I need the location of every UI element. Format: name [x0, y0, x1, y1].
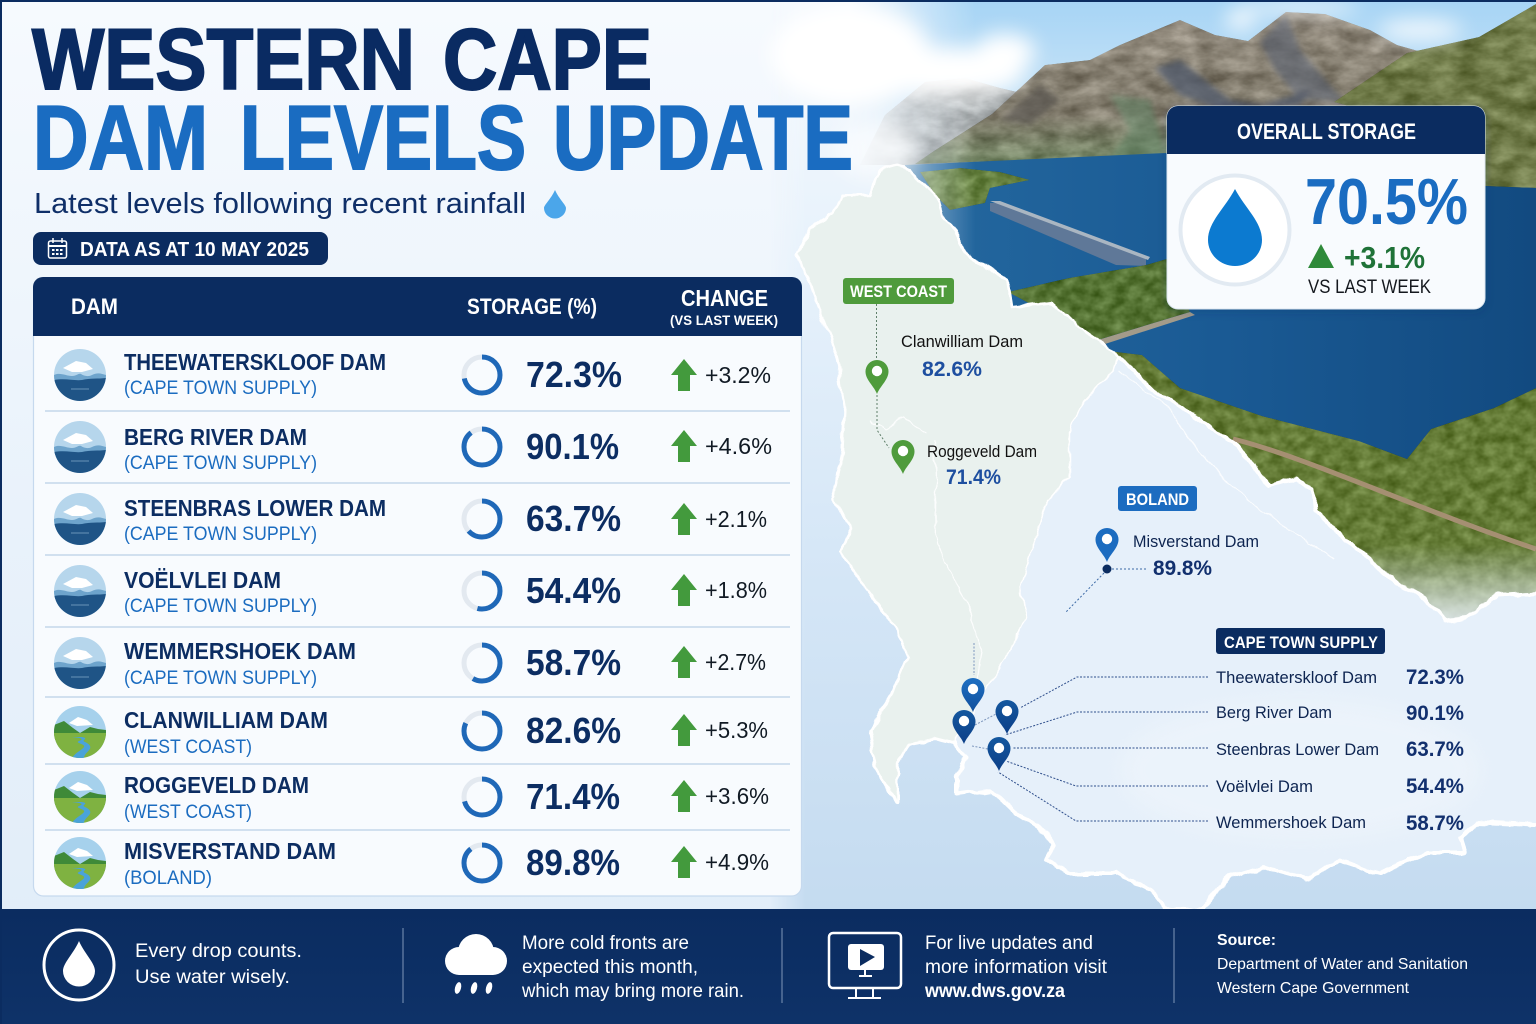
Boland region labels: [1066, 486, 1259, 612]
row: Roggeveld Dam: [54, 771, 769, 824]
icon: calendar: [48, 238, 66, 258]
icon: storage water drop: [1180, 176, 1290, 284]
table header: STORAGE (%): [467, 294, 597, 319]
row: Berg River Dam: +4.6%: [705, 433, 772, 459]
list: Cape Town dams: 72.3%: [1406, 666, 1464, 689]
pin: Cape Town dam 4: [988, 737, 1010, 771]
footer: [0, 909, 1536, 1024]
row: Theewaterskloof Dam: [54, 349, 771, 401]
label: Misverstand Dam: Misverstand Dam: [1133, 532, 1259, 551]
footer: source: Department of Water and Sanitation: [1217, 956, 1468, 973]
row: Theewaterskloof Dam: +3.2%: [705, 362, 771, 388]
badge: West Coast: WEST COAST: [850, 282, 948, 301]
row: Steenbras Lower Dam: (CAPE TOWN SUPPLY): [124, 524, 317, 545]
row: Misverstand Dam: MISVERSTAND DAM: [124, 838, 336, 864]
row: Clanwilliam Dam: 82.6%: [526, 710, 621, 751]
row: Theewaterskloof Dam: THEEWATERSKLOOF DAM: [124, 349, 386, 375]
badge: Boland: [1118, 486, 1197, 511]
leader lines: [972, 643, 1208, 821]
table header: [33, 277, 802, 336]
list: Cape Town dams: [1216, 666, 1464, 835]
row: Wemmershoek Dam: [54, 637, 766, 689]
label: Roggeveld Dam: 71.4%: [946, 466, 1001, 489]
badge: Cape Town Supply: CAPE TOWN SUPPLY: [1224, 633, 1379, 652]
landscape photo: mountains, lake and dam: [869, 2, 1536, 618]
row: Voelvlei Dam: 54.4%: [526, 570, 621, 611]
row: Steenbras Lower Dam: 63.7%: [526, 498, 621, 539]
clouds: [770, 2, 1462, 180]
row: Wemmershoek Dam: 58.7%: [526, 642, 621, 683]
footer: website: www.dws.gov.za: [924, 981, 1065, 1002]
list: Cape Town dams: 54.4%: [1406, 775, 1464, 798]
table header: CHANGE: [681, 285, 768, 311]
badge: West Coast: [843, 278, 954, 304]
row: Berg River Dam: BERG RIVER DAM: [124, 424, 307, 450]
sea background: [779, 276, 1536, 909]
row: Roggeveld Dam: +3.6%: [705, 783, 769, 809]
icon: rain cloud: [445, 934, 507, 995]
row: Steenbras Lower Dam: +2.1%: [705, 506, 767, 532]
panel: dam table: [33, 277, 802, 896]
list: Cape Town dams: Berg River Dam: [1216, 703, 1332, 722]
footer: water message: Every drop counts.: [135, 941, 302, 962]
label: Roggeveld Dam: [927, 442, 1037, 489]
title: LEVELS: [240, 88, 526, 189]
row: Misverstand Dam: 89.8%: [526, 842, 620, 883]
icon: monitor with play button: [829, 933, 901, 998]
list: Cape Town dams: 90.1%: [1406, 702, 1464, 725]
title: UPDATE: [553, 88, 853, 189]
footer: water message: [135, 941, 302, 988]
label: Clanwilliam Dam: [901, 332, 1023, 381]
pin: Misverstand: [1096, 528, 1118, 562]
weekly change: +3.1%: [1344, 240, 1425, 275]
list: Cape Town dams: 58.7%: [1406, 812, 1464, 835]
table header: DAM: [71, 294, 118, 319]
row: Clanwilliam Dam: CLANWILLIAM DAM: [124, 707, 328, 733]
row: Steenbras Lower Dam: [54, 493, 767, 545]
label: Misverstand Dam: 89.8%: [1153, 557, 1212, 580]
row: Voelvlei Dam: +1.8%: [705, 577, 767, 603]
row: Theewaterskloof Dam: 72.3%: [526, 354, 622, 395]
row: Voelvlei Dam: [54, 565, 767, 617]
footer: water message: Use water wisely.: [135, 967, 290, 988]
row: Wemmershoek Dam: WEMMERSHOEK DAM: [124, 638, 356, 664]
footer: source: Western Cape Government: [1217, 980, 1410, 997]
footer: rain forecast: More cold fronts are: [522, 933, 689, 954]
row: Roggeveld Dam: ROGGEVELD DAM: [124, 772, 309, 798]
row: Misverstand Dam: (BOLAND): [124, 868, 212, 889]
row: Berg River Dam: 90.1%: [526, 426, 619, 467]
pin: Roggeveld: [892, 440, 914, 474]
list: Cape Town dams: Steenbras Lower Dam: [1216, 740, 1379, 759]
row: Steenbras Lower Dam: STEENBRAS LOWER DAM: [124, 495, 386, 521]
title: CAPE: [443, 12, 652, 108]
label: Clanwilliam Dam: 82.6%: [922, 358, 982, 381]
label: Roggeveld Dam: Roggeveld Dam: [927, 442, 1037, 461]
date badge: DATA AS AT 10 MAY 2025: [80, 239, 309, 261]
West Coast region labels: [843, 278, 1037, 489]
pin: Cape Town dam 1: [962, 678, 984, 712]
footer: rain forecast: expected this month,: [522, 957, 698, 978]
footer: website: [924, 933, 1108, 1002]
title: WESTERN: [32, 12, 415, 108]
pin: Cape Town dam 3: [996, 700, 1018, 734]
icon: water drop: [544, 190, 566, 218]
row: Clanwilliam Dam: [54, 706, 768, 759]
row: Wemmershoek Dam: (CAPE TOWN SUPPLY): [124, 668, 317, 689]
row: Voelvlei Dam: (CAPE TOWN SUPPLY): [124, 596, 317, 617]
storage header: OVERALL STORAGE: [1237, 119, 1416, 144]
row: Misverstand Dam: [54, 837, 769, 890]
label: Clanwilliam Dam: Clanwilliam Dam: [901, 332, 1023, 351]
row: Wemmershoek Dam: +2.7%: [705, 649, 766, 675]
footer: rain forecast: which may bring more rain.: [521, 981, 744, 1002]
row: Roggeveld Dam: 71.4%: [526, 776, 620, 817]
title: DAM: [33, 88, 208, 189]
row: Theewaterskloof Dam: (CAPE TOWN SUPPLY): [124, 378, 317, 399]
row: Misverstand Dam: +4.9%: [705, 849, 769, 875]
row: Clanwilliam Dam: (WEST COAST): [124, 737, 252, 758]
storage figure: 70.5%: [1305, 165, 1468, 238]
icon: drop in circle: [44, 930, 114, 1000]
footer: source: Source:: [1217, 932, 1276, 949]
date badge: [33, 232, 328, 265]
badge: Boland: BOLAND: [1126, 490, 1189, 509]
row: Berg River Dam: (CAPE TOWN SUPPLY): [124, 453, 317, 474]
icon: up triangle: [1308, 244, 1334, 268]
pin: Clanwilliam: [866, 360, 888, 394]
title: [32, 12, 853, 189]
badge: Cape Town Supply: [1216, 628, 1385, 654]
row: Roggeveld Dam: (WEST COAST): [124, 802, 252, 823]
footer: source: [1217, 932, 1468, 997]
row: Berg River Dam: [54, 421, 772, 474]
list: Cape Town dams: Wemmershoek Dam: [1216, 813, 1366, 832]
pin: Cape Town dam 2: [952, 710, 976, 744]
list: Cape Town dams: Voëlvlei Dam: [1216, 777, 1313, 796]
comparison label: VS LAST WEEK: [1308, 277, 1431, 298]
Cape Town supply labels: [952, 628, 1464, 835]
footer: rain forecast: [521, 933, 744, 1002]
storage header: [1167, 106, 1485, 154]
subtitle: Latest levels following recent rainfall: [34, 188, 526, 220]
map of the Western Cape: [797, 167, 1536, 910]
label: Misverstand Dam: [1133, 532, 1259, 580]
row: Voelvlei Dam: VOËLVLEI DAM: [124, 567, 281, 593]
table body: [34, 300, 802, 896]
row: Clanwilliam Dam: +5.3%: [705, 717, 768, 743]
footer: website: more information visit: [925, 957, 1108, 978]
list: Cape Town dams: Theewaterskloof Dam: [1216, 668, 1377, 687]
list: Cape Town dams: 63.7%: [1406, 738, 1464, 761]
footer: website: For live updates and: [925, 933, 1093, 954]
panel: overall storage: [1167, 106, 1485, 309]
table header: (VS LAST WEEK): [670, 312, 778, 328]
